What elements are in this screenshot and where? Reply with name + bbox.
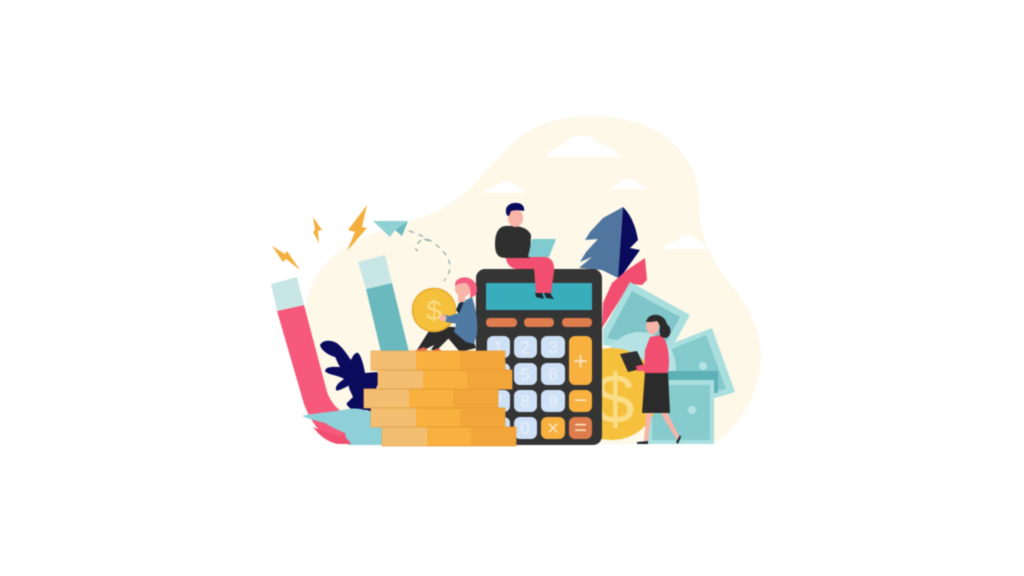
bolt middle	[313, 217, 322, 243]
shoes	[637, 435, 681, 444]
laptop	[528, 239, 556, 257]
hair bun	[660, 324, 670, 338]
magnet right tip	[358, 255, 392, 289]
shoes	[414, 347, 441, 351]
key numbers: 9	[548, 392, 558, 411]
key numbers: 3	[548, 338, 558, 357]
key numbers: 0	[520, 419, 530, 438]
banknote back	[603, 282, 690, 355]
person: woman with coin: $	[426, 295, 442, 326]
neck	[458, 294, 465, 302]
background blob	[304, 116, 761, 444]
operator keys	[541, 336, 592, 439]
hair	[455, 277, 477, 297]
banknotes	[603, 282, 735, 444]
magnet left tip	[271, 277, 304, 311]
arm	[636, 352, 669, 371]
operator symbols	[547, 346, 588, 440]
key numbers: 6	[548, 365, 558, 384]
red leaf	[602, 258, 647, 328]
head	[646, 318, 659, 334]
key numbers: 5	[520, 365, 530, 384]
number keys	[487, 336, 565, 439]
key numbers: 2	[520, 338, 530, 357]
torso	[644, 335, 669, 373]
coin layer 5	[382, 427, 516, 446]
navy leaf	[320, 341, 380, 412]
skirt	[642, 372, 670, 413]
calculator	[476, 269, 602, 445]
cloud 4	[662, 235, 709, 249]
jacket	[454, 297, 477, 344]
key numbers: 1	[493, 338, 503, 357]
big dollar coin	[566, 348, 658, 440]
banknote right	[668, 328, 735, 398]
lightning bolts	[272, 205, 367, 270]
magnet	[271, 255, 409, 444]
operator symbols: ×	[547, 417, 559, 440]
person: woman with coin	[412, 277, 477, 352]
bolt right	[347, 205, 367, 251]
calculator screen	[486, 283, 592, 310]
head	[455, 279, 471, 297]
far leg	[431, 331, 452, 350]
legs	[506, 257, 554, 293]
arm	[443, 304, 475, 325]
magnet right arm	[366, 283, 409, 352]
person: woman with clipboard	[620, 315, 681, 444]
equals key	[569, 417, 592, 439]
coin layer 1	[371, 351, 505, 370]
function buttons	[486, 318, 592, 327]
banknote shadow strip	[668, 371, 718, 393]
operator symbols: −	[573, 387, 588, 414]
person: man with laptop	[495, 203, 556, 299]
cloud 1	[546, 135, 621, 157]
coin layer 2	[378, 370, 512, 389]
hair	[506, 203, 524, 216]
coin	[412, 288, 456, 332]
near leg and hip	[417, 326, 476, 352]
banknote front	[647, 380, 714, 444]
coin layer 4	[371, 408, 505, 427]
bolt left	[272, 246, 300, 270]
torso	[495, 226, 531, 258]
big dollar coin: $	[596, 360, 634, 438]
feather leaf behind calculator	[579, 207, 640, 278]
calculator body	[476, 269, 602, 445]
banknote circle	[604, 332, 676, 404]
legs	[644, 412, 680, 441]
hand	[440, 314, 446, 322]
clouds	[482, 135, 709, 249]
shoes	[535, 293, 554, 299]
magnet left arm	[277, 305, 352, 444]
stack separators	[364, 370, 516, 427]
cloud 3	[610, 179, 646, 189]
key numbers	[493, 338, 558, 438]
coin stack	[364, 351, 516, 446]
dashed flight path	[409, 231, 450, 281]
operator symbols: +	[573, 346, 588, 376]
key numbers: 8	[520, 392, 530, 411]
key numbers: 7	[493, 392, 503, 411]
head	[508, 209, 523, 227]
teal leaf at base	[302, 408, 385, 445]
key numbers: 4	[493, 365, 503, 384]
clipboard	[620, 351, 645, 372]
collar	[456, 301, 464, 314]
coin layer 3	[364, 389, 498, 408]
paper plane	[373, 221, 408, 237]
operator symbols: =	[574, 415, 587, 440]
hair	[646, 315, 667, 337]
cloud 2	[482, 182, 526, 193]
